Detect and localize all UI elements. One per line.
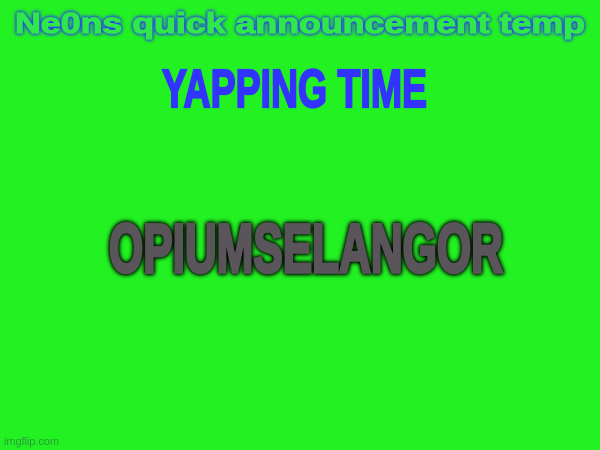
heading: yapping time: YAPPING TIME — [162, 59, 427, 119]
watermark: imgflip.com — [4, 436, 59, 448]
title: Ne0ns quick announcement temp — [15, 8, 585, 40]
